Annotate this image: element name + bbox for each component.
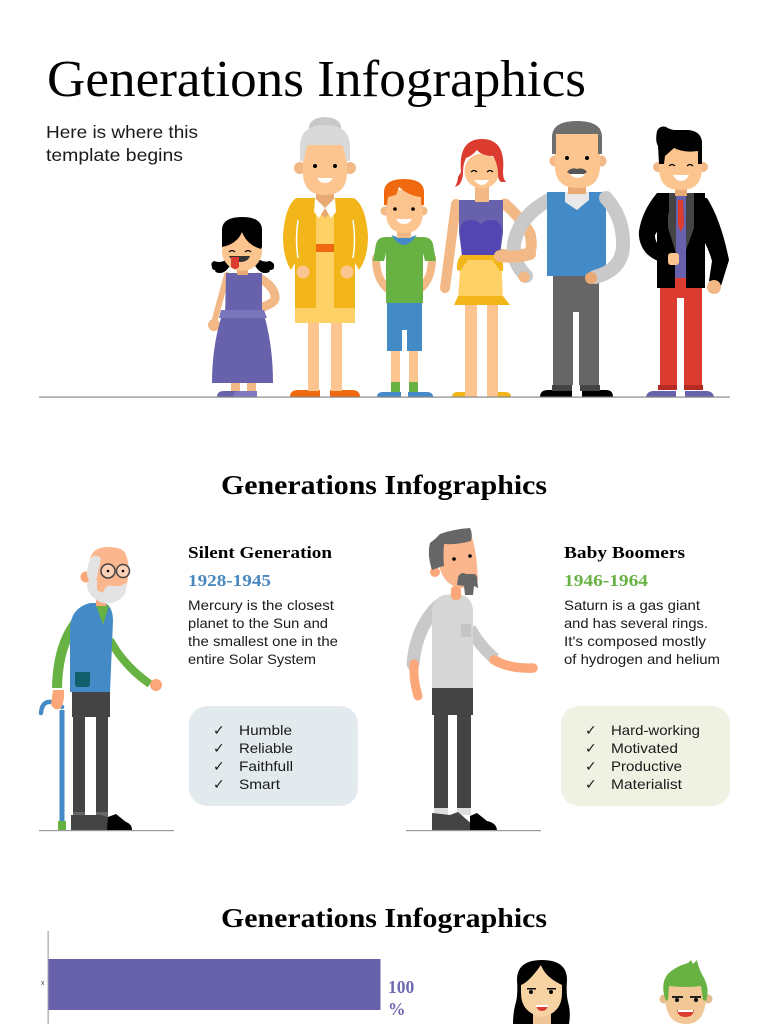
bar chart: x <box>41 980 45 987</box>
figure: man in black suit and red trousers <box>639 126 729 397</box>
description: It's composed mostly <box>564 633 706 649</box>
years: 1946-1964 <box>564 571 649 590</box>
description: planet to the Sun and <box>188 615 328 631</box>
traits card: ✓ <box>585 741 597 757</box>
description: the smallest one in the <box>188 633 338 649</box>
traits card: Reliable <box>239 740 293 756</box>
traits card: Motivated <box>611 740 678 756</box>
bar chart <box>41 931 414 1024</box>
description: and has several rings. <box>564 615 708 631</box>
name: Baby Boomers <box>564 543 685 562</box>
intro text <box>46 122 198 165</box>
panel: baby boomers <box>406 528 730 831</box>
figure: man with goatee <box>413 528 533 831</box>
figure: boy in green t-shirt <box>373 179 436 397</box>
traits card: Productive <box>611 758 682 774</box>
family illustration <box>208 117 729 397</box>
traits card: ✓ <box>213 723 225 739</box>
description: entire Solar System <box>188 651 316 667</box>
ground line <box>406 830 541 831</box>
description: Mercury is the closest <box>188 597 334 613</box>
traits card: ✓ <box>585 777 597 793</box>
description <box>188 597 338 667</box>
traits card: ✓ <box>213 777 225 793</box>
traits card: Materialist <box>611 776 682 792</box>
figure: old man with cane <box>41 547 162 830</box>
intro text: template begins <box>46 145 183 165</box>
ground line <box>39 396 730 398</box>
bar chart: % <box>388 999 406 1019</box>
description: Saturn is a gas giant <box>564 597 700 613</box>
traits card: ✓ <box>213 759 225 775</box>
figure: man in blue vest <box>500 121 623 397</box>
traits card: Faithfull <box>239 758 293 774</box>
title: Generations Infographics <box>47 51 586 108</box>
section heading: Generations Infographics <box>221 470 547 500</box>
avatar: man with green hair <box>660 960 712 1024</box>
traits card: ✓ <box>585 723 597 739</box>
bar chart: 100 <box>388 977 414 997</box>
traits card <box>561 706 730 806</box>
avatar: woman with black hair <box>513 960 570 1024</box>
panel: silent generation <box>39 543 358 831</box>
traits card: ✓ <box>213 741 225 757</box>
intro text: Here is where this <box>46 122 198 142</box>
ground line <box>39 830 174 831</box>
figure: woman with red hair <box>445 139 531 397</box>
section heading: Generations Infographics <box>221 903 547 933</box>
traits card: ✓ <box>585 759 597 775</box>
traits card: Hard-working <box>611 722 700 738</box>
years: 1928-1945 <box>188 571 271 590</box>
description <box>564 597 720 667</box>
traits card <box>189 706 358 806</box>
name: Silent Generation <box>188 543 333 562</box>
description: of hydrogen and helium <box>564 651 720 667</box>
figure: grandmother in yellow cardigan <box>283 117 368 397</box>
traits card: Smart <box>239 776 280 792</box>
figure: girl in purple dress <box>208 217 275 397</box>
traits card: Humble <box>239 722 292 738</box>
